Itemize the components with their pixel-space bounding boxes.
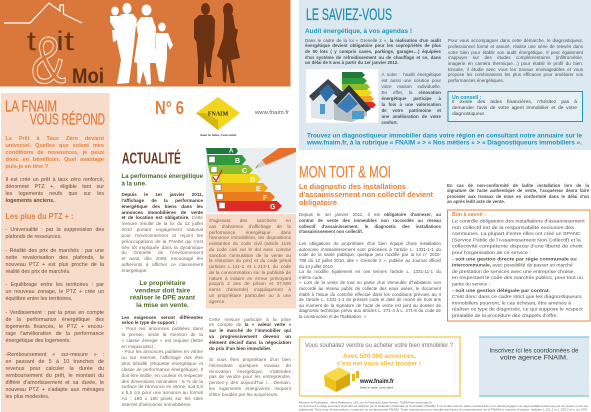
illustration: dark couple silhouettes xyxy=(194,3,240,84)
callout: un conseil: Il existe des aides financières, n'hésitez pas à xyxy=(452,100,577,105)
callout: un conseil: Un conseil : xyxy=(452,95,482,101)
panel: agency contact: votre agence FNAIM. xyxy=(500,354,568,362)
article text: support requirements: plus détaillé (étiquette énergétique et xyxy=(122,361,203,366)
illustration: houses with energy bars xyxy=(306,69,378,123)
list: Verdissement: énergétique des logements. xyxy=(6,338,71,344)
logo: FNAIM diamond: FNAIM xyxy=(208,112,228,118)
footer legal text: Membre de Publication : René Pallincourt, 129, rue du Faubourg Saint Honoré, 75008 Paris www.fnaim.fr xyxy=(299,400,432,404)
article text: code de la santé: au moment de la signature de l'acte de vente est joint au dossier de xyxy=(299,303,441,308)
list: Verdissement: rage l'amélioration de la performance xyxy=(6,331,104,337)
article text: valeur verte: en compte de la « valeur verte » xyxy=(209,322,291,327)
list: Remboursement: revenus pour calculer la durée du xyxy=(6,366,104,372)
text: diagnostiqueur: s'appuyer sur des études complémentaires (infiltrométrie, xyxy=(448,55,583,60)
question text xyxy=(6,136,104,171)
text: non-conformité xyxy=(447,183,589,206)
text: Grenelle intro: Dans le cadre de la loi « Grenelle 2 », la réalisation d'un audit xyxy=(305,38,441,43)
article text: left column xyxy=(122,192,203,274)
article text: obligation xyxy=(299,212,441,235)
list: Réalité des prix: - Réalité des prix de marchés : par une xyxy=(6,248,104,254)
callout: bon à savoir: (Service Public de l'Assainissement Non Collectif) et la xyxy=(452,237,581,243)
illustration: energy label chart: A xyxy=(229,148,234,154)
article text: énergivores: Si vous êtes propriétaire d'un bien xyxy=(209,357,291,362)
advertisement: FNAIM annonces: www.fnaim.fr xyxy=(359,379,395,385)
callout: bon à savoir: préalable de la procédure dite d'appels d'offre. xyxy=(452,313,558,319)
panel: sanctions: (articles L.121-1 et L.213-1 du code xyxy=(209,264,291,269)
article text: support requirements: x 5,5 cm pour une annonce au format xyxy=(122,390,203,395)
intro paragraph: les logements neufs que sur les xyxy=(6,191,104,197)
masthead banner xyxy=(0,0,290,97)
article text: valeur verte: sur le marché de l'immobilier qui xyxy=(209,328,291,333)
list: Equilibrage: - Equilibrage entre les territoires : par xyxy=(6,282,104,288)
list: Remboursement xyxy=(6,352,104,401)
illustration: energy label chart: E xyxy=(256,186,261,193)
footer legal text: adhérents. Pour plus d'informations, contactez un professionnel FNAIM. Toute reproduction est interdite sauf avec le consentement de la FNAIM et mention d'origine, (articles L.121-1 et L.335-2 et s. du CPI). xyxy=(299,408,588,412)
text: diagnostiqueur: Pour vous accompagner dans cette démarche, le diagnostiqueur, xyxy=(448,38,583,43)
article text: left column: très tôt impliquée dans la dynamique xyxy=(122,245,203,250)
heading: Le saviez-vous: LE SAVIEZ-VOUS xyxy=(306,6,392,24)
text: Grenelle intro xyxy=(305,38,441,67)
article text: code de la santé: « Lors de la vente de tout ou partie d'un immeuble d'habitation non xyxy=(299,280,441,285)
article text: left column: 2010 portant engagement national xyxy=(122,227,203,232)
text: diagnostiqueur: performances énergétiques. xyxy=(448,78,504,83)
list: Remboursement: nouveau PTZ + s'adapte aux ménages xyxy=(6,387,104,393)
illustration: energy label chart: D xyxy=(250,177,255,184)
callout: bon à savoir: - soit une gestion directe par régie communale ou xyxy=(452,256,577,262)
article text: code de la santé: autonome d'assainissement sont précisées à l'article L. 1331-1-1 du xyxy=(299,247,441,252)
panel: sanctions: cas d'absence d'affichage de la xyxy=(209,224,291,229)
callout: bon à savoir: en respectant le code des marchés publics, pour tout ou xyxy=(452,275,583,281)
list: Verdissement: - Verdissement : par la prise en compte xyxy=(6,310,104,316)
list: Verdissement: de la performance énergétique des xyxy=(6,317,104,323)
article text: support requirements: doit être lisible, en couleur et respecter xyxy=(122,373,203,378)
article text: énergivores: pas de vendre pour les entreprendre, xyxy=(209,374,291,379)
pull quote: vendeur doit faire xyxy=(135,287,190,294)
subheading: Les plus du PTZ: Les plus du PTZ + : xyxy=(6,212,74,221)
article text: left column: et avait, dès 2008, encouragé les xyxy=(122,256,203,261)
article text: support requirements: Internet d'annonces immobilières. xyxy=(122,402,191,407)
text: diagnostiqueur xyxy=(448,38,583,84)
article text: left column: annonces immobilières de vente xyxy=(122,210,203,215)
subheading: diagnostic xyxy=(299,182,434,207)
callout: bon à savoir: intercommunale, avec possibilité de passer un marché xyxy=(452,263,573,269)
article text: énergivores: rénovation énergétique, n'attendez xyxy=(209,369,291,374)
logo word: Moi: Moi xyxy=(72,65,104,88)
icon: house outline xyxy=(4,3,82,23)
article text: support requirements: classe de performance énergétique). Il xyxy=(122,367,203,372)
panel: agency contact: Inscrivez ici les coordonnées de xyxy=(490,348,579,354)
heading: La FNAIM vous répond: LA FNAIM xyxy=(5,98,57,116)
article text: énergivores xyxy=(209,357,291,398)
intro paragraph xyxy=(6,177,104,205)
panel: sanctions: performance énergétique dans xyxy=(209,230,291,235)
footer legal text: Ce document à usage purement informatif est distribué par la Fédération Nationale de l'Immobilier (FNAIM). Il ne confère aucune valeur contractuelle et ne saurait engager une responsabilité quelconque de son auteur ou de ses xyxy=(299,404,589,408)
article text: support requirements: Les exigences seront différentes xyxy=(122,314,203,320)
article text: support requirements: « classe énergie » est requise (lettre xyxy=(122,338,203,343)
article text: énergivores: nécessitant quelques travaux de xyxy=(209,363,291,368)
article text: left column: et de location est obligatoire. Cette xyxy=(122,215,203,220)
panel: Actualité xyxy=(122,148,203,408)
text: diagnostiqueur: votre bien pour établir son audit énergétique. Il peut également xyxy=(448,50,583,54)
article text: énergivores: pensez-y dès aujourd'hui !... Demain, xyxy=(209,380,291,385)
subheading: diagnostic: Le diagnostic des installations xyxy=(299,182,406,191)
callout: bon à savoir: Le contrôle obligatoire des installations d'assainissement xyxy=(452,218,585,224)
question text: Le Prêt à Taux Zéro devient xyxy=(6,136,104,142)
list: Remboursement: les plus modestes. xyxy=(6,394,49,400)
text: Grenelle intro: énergétique devient obligatoire pour les copropriétés de plus xyxy=(305,43,441,48)
logo word: toit: t xyxy=(27,26,37,56)
article text: valeur verte: va progressivement devenir un xyxy=(209,334,291,339)
call to action: annuaire xyxy=(306,132,583,146)
article text: left column: énergétique des biens dans les xyxy=(122,204,203,209)
article text: code de la santé: de l'article L. 1331-1-1 du présent code et daté de moins de trois ans xyxy=(299,297,441,302)
article text: code de la santé: même code : xyxy=(299,275,325,280)
callout: bon à savoir: - soit une gestion déléguée par contrat. xyxy=(452,288,551,294)
panel: sanctions: S'agissant des sanctions en xyxy=(209,218,291,223)
article text: code de la santé: La loi modifie également en ces termes l'article L. 1331-11-1 du xyxy=(299,269,441,274)
list: Réalité des prix: réalité des prix de marchés. xyxy=(6,269,71,275)
text: diagnostiqueur: Ensuite, il étudie avec vous les travaux envisageables et vous xyxy=(448,67,583,72)
advertisement: FNAIM annonces: c'est net vous allez trouver ! xyxy=(337,360,421,368)
article text: support requirements: en majuscules) ; xyxy=(122,344,156,349)
panel: La FNAIM vous répond xyxy=(1,93,110,412)
subheading: diagnostic: obligatoire xyxy=(299,198,337,207)
list: Remboursement: remboursement du prêt, le montant du xyxy=(6,373,104,379)
list: Universalité: - Universalité : par la suppression des xyxy=(6,227,104,233)
logo word: toit: it xyxy=(56,26,75,56)
text: Grenelle intro: un délai de 5 ans à partir du 1er janvier 2012. xyxy=(305,60,398,65)
panel: sanctions: jusqu'à 2 ans de prison et 37.500 xyxy=(209,281,291,286)
article text: support requirements: - Pour les annonces publiées en vitrine xyxy=(122,349,203,354)
text: à noter: la fois à une valorisation xyxy=(382,102,441,106)
text: à noter: énergétique participe à xyxy=(382,96,441,100)
heading: Mon toit et moi: MON TOIT & MOI xyxy=(299,163,391,181)
list: Equilibrage: équilibre entre les territoires. xyxy=(6,296,72,302)
list: Equilibrage xyxy=(6,282,104,303)
panel: sanctions: la réduction du prix) et du code pénal xyxy=(209,258,291,263)
article text: code de la santé: raccordé au réseau public de collecte des eaux usées, le document xyxy=(299,286,441,291)
text: diagnostiqueur: propose les combinaisons les plus efficaces pour améliorer vos xyxy=(448,72,583,77)
article text: code de la santé: du 13 juillet 2010. xyxy=(299,264,334,269)
advertisement: FNAIM annonces: Vous souhaitez vendre ou acheter votre bien immobilier ? xyxy=(305,342,454,349)
article text: obligation: contrat de vente des immeubles non raccordés au réseau xyxy=(299,218,441,223)
article text: left column: mesure résulte de la loi du 12 juillet xyxy=(122,221,203,226)
intro paragraph: logements anciens. xyxy=(6,198,55,204)
article text: valeur verte: élément décisif dans la négociation xyxy=(209,340,291,345)
article text: left column: Depuis le 1er janvier 2011, xyxy=(122,192,203,197)
article text: left column: pour l'environnement et rejoint les xyxy=(122,233,203,238)
question text: puis-je en tirer ? xyxy=(6,164,48,170)
text: diagnostiqueur: imagerie en caméra thermique…) pour établir le profil du bien. xyxy=(448,61,583,66)
call to action: annuaire: www.fnaim.fr, à la rubrique « FNAIM » > « Nos métiers » > « Diagnostiqueurs immobiliers ». xyxy=(306,140,582,146)
logo: FNAIM diamond: Avec le cube, c'est carré. xyxy=(200,133,237,137)
list: Remboursement: -Remboursement « sur-mesure » : xyxy=(6,352,104,358)
article text: support requirements: selon le type de support : xyxy=(122,320,177,325)
logo word: toit xyxy=(27,26,75,56)
article text: code de la santé: Les obligations du propriétaire d'un bien équipé d'une installation xyxy=(299,241,441,246)
article text: obligation: d'assainissement non collectif. xyxy=(299,229,363,234)
illustration: energy label chart: F xyxy=(263,195,268,202)
list: Réalité des prix xyxy=(6,248,104,276)
callout: bon à savoir: communes. La plupart d'entre elles ont créé un SPANC xyxy=(452,231,581,237)
illustration: energy label chart: G xyxy=(270,204,276,211)
article text: code de la santé: 788 du 12 juillet 2010, dite « Grenelle 2 », publiée au Journal officiel xyxy=(299,258,441,263)
panel: Mon toit et moi xyxy=(299,163,590,321)
pull quote: Le propriétaire xyxy=(139,280,186,287)
panel: sanctions: un propriétaire particulier ou à une xyxy=(209,293,291,298)
text: non-conformité: En cas de non-conformité de ladite installation lors de la xyxy=(447,183,589,188)
logo: FNAIM diamond xyxy=(196,97,240,137)
illustration: energy label chart: B xyxy=(235,158,240,165)
panel: Le saviez-vous xyxy=(299,0,591,150)
article text: code de la santé: diagnostic technique prévu aux articles L. 271-4 à L. 271-5 du code de xyxy=(299,308,441,313)
text: Grenelle intro: d'un système de refroidissement ou de chauffage et ce, dans xyxy=(305,55,441,60)
article text: left column: l'affichage de la performance xyxy=(122,198,203,203)
icon: yellow cube xyxy=(324,367,359,392)
article text: valeur verte xyxy=(209,316,291,352)
callout: bon à savoir: réaliser ce type de diagnostic, ce qui suppose le respect xyxy=(452,307,583,313)
list: Remboursement: en passant de 5 à 10 tranches de xyxy=(6,359,104,365)
website address: www.fnaim.fr xyxy=(254,110,289,116)
text: non-conformité: an après ledit acte de vente. xyxy=(447,199,505,204)
article text: valeur verte: Cette mesure participe à la prise xyxy=(209,316,291,322)
article text: obligation: Depuis le 1er janvier 2011, il est obligatoire d'annexer, au xyxy=(299,212,441,217)
callout: bon à savoir: de prestation de services avec une entreprise choisie, xyxy=(452,269,575,275)
pull quote: la mise en vente. xyxy=(136,302,189,309)
panel: sanctions: du code civil sur le dol avec comme xyxy=(209,247,291,252)
callout: bon à savoir: immobiliers pourront, le cas échéant, être amenés à xyxy=(452,300,571,306)
panel: sanctions: euros d'amende) s'appliqueront à xyxy=(209,287,291,292)
intro paragraph: Il est créé un prêt à taux zéro renforcé, xyxy=(6,177,104,183)
pull quote xyxy=(130,280,196,309)
article text: code de la santé: établi à l'issue du contrôle effectué dans les conditions prévues au II xyxy=(299,292,441,297)
callout: bon à savoir: C'est donc dans ce cadre strict que les diagnostiqueurs xyxy=(452,294,582,300)
text: à noter: une amélioration de votre xyxy=(382,114,441,118)
intro paragraph: dénommé PTZ +, éligible tant sur xyxy=(6,184,104,190)
subheading: performance énergétique xyxy=(122,173,203,188)
question text: conditions de ressources, je peux xyxy=(6,150,104,156)
call to action: annuaire: Trouvez un diagnostiqueur immobilier dans votre région en consultant notre annuaire sur le xyxy=(307,132,583,140)
footer legal text xyxy=(299,400,589,412)
advertisement: FNAIM annonces: Avec 500 000 annonces, xyxy=(343,353,416,360)
advertisement: FNAIM annonces: Avec le cube, c'est carré. xyxy=(360,386,394,390)
article text: énergivores: les logements énergivores risquent xyxy=(209,386,291,391)
issue number: N° 6 xyxy=(155,98,184,118)
panel: sanctions: existantes du code civil (article 1116 xyxy=(209,241,291,246)
panel: sanctions xyxy=(206,214,296,308)
article text: support requirements: ou sur Internet, l'affichage doit être xyxy=(122,355,203,360)
heading: La FNAIM vous répond xyxy=(5,98,105,128)
text: à noter: est aussi une solution pour xyxy=(382,78,441,82)
article text: support requirements: - Pour les annonces publiées dans xyxy=(122,326,203,331)
advertisement: FNAIM annonces xyxy=(300,337,460,396)
callout: bon à savoir: Bon à savoir : xyxy=(452,212,487,218)
article text: obligation: collectif d'assainissement, le diagnostic des installations xyxy=(299,224,441,229)
article text: code de la santé: la construction et de l'habitation. » xyxy=(299,314,366,319)
text: à noter xyxy=(382,72,441,126)
article text: support requirements: A4 ; 180 x 180 pixels sur les sites xyxy=(122,396,203,401)
text: à noter: votre maison individuelle. xyxy=(382,84,441,88)
panel: sanctions: agence. xyxy=(209,299,226,304)
text: diagnostiqueur: professionnel formé et assuré, réalise une série de relevés dans xyxy=(448,44,583,49)
text: à noter: En effet, la rénovation xyxy=(382,90,441,94)
callout: bon à savoir: non collectif est de la responsabilité exclusive des xyxy=(452,225,575,231)
panel: agency contact xyxy=(479,336,589,396)
illustration: energy label chart: C xyxy=(242,168,247,175)
text: à noter: confort. xyxy=(382,120,398,124)
callout: bon à savoir: pour l'organisation de ce service : xyxy=(452,250,531,256)
article text: support requirements: surface de l'annonce en vitrine, soit 5,5 xyxy=(122,384,203,389)
callout: un conseil: diagnostiqueur. xyxy=(452,112,485,117)
callout: bon à savoir: collectivité compétente dispose d'une liberté de choix xyxy=(452,244,583,250)
list: Réalité des prix: nette revalorisation des plafonds, le xyxy=(6,255,104,261)
callout: bon à savoir xyxy=(448,210,590,321)
article text: code de la santé xyxy=(299,241,441,320)
article text: left column: préoccupations de la FNAIM qui s'est xyxy=(122,239,203,244)
article text: left column: adhérents à afficher ce classement xyxy=(122,262,203,267)
article text: left column: du Grenelle de l'environnement xyxy=(122,250,203,255)
list: Réalité des prix: nouveau PTZ + est plus proche de la xyxy=(6,262,104,268)
article text: énergivores: d'être boudés par les acquéreurs. xyxy=(209,392,279,397)
article text: support requirements xyxy=(122,314,203,408)
article text: left column: énergétique. xyxy=(122,268,148,273)
text: à noter: A noter : l'audit énergétique xyxy=(382,72,441,76)
article text: code de la santé: code de la santé publique, quelque peu modifié par la loi n° 2010- xyxy=(299,252,441,257)
list: Universalité: plafonds de ressources. xyxy=(6,234,62,240)
heading: La FNAIM vous répond: VOUS RÉPOND xyxy=(30,112,105,128)
list: Verdissement: logements financés, le PTZ + encou- xyxy=(6,324,104,330)
illustration: energy label chart xyxy=(206,148,296,213)
subheading: performance énergétique: La performance énergétique xyxy=(122,173,203,180)
text: non-conformité: signature de l'acte authentique de vente, l'acquéreur devra faire xyxy=(447,188,589,193)
panel: sanctions: nature à induire en erreur prévoyant xyxy=(209,276,291,281)
logo ampersand: & xyxy=(31,23,66,97)
subheading: performance énergétique: à la une. xyxy=(122,180,147,188)
subheading: audit énergétique: Audit énergétique, à vos agendas ! xyxy=(305,28,412,35)
list: Universalité xyxy=(6,227,104,241)
pull quote: réaliser le DPE avant xyxy=(130,295,196,302)
panel: sanctions: sanction l'annulation de la vente ou xyxy=(209,253,291,258)
callout: bon à savoir: partie du service ; xyxy=(452,282,490,288)
list: Verdissement xyxy=(6,310,104,345)
illustration: white family silhouettes xyxy=(110,3,173,85)
text: Grenelle intro: de 50 lots ( y compris caves, parkings, garages…) équipées xyxy=(305,49,441,54)
question text: donc en bénéficier. Quel avantage xyxy=(6,157,104,163)
text: non-conformité: procéder aux travaux de mise en conformité dans le délai d'un xyxy=(447,194,589,199)
article text: valeur verte: du prix d'un bien immobilier. xyxy=(209,346,271,351)
text: à noter: de votre patrimoine et xyxy=(382,108,441,112)
article text: support requirements: la presse, seule la mention de la xyxy=(122,332,203,337)
question text: universel. Quelles que soient mes xyxy=(6,143,104,149)
callout: un conseil xyxy=(448,92,582,122)
list: Remboursement: différé d'amortissement et sa durée, le xyxy=(6,380,104,386)
heading: Actualité: ACTUALITÉ xyxy=(122,148,181,168)
panel: sanctions: l'annonce immobilière, les dispositions xyxy=(209,235,291,240)
list: Equilibrage: un nouveau zonage, le PTZ + crée un xyxy=(6,289,104,295)
subheading: diagnostic: d'assainissement non collectif devient xyxy=(299,190,434,199)
panel: sanctions: de la consommation sur la publicité de xyxy=(209,270,291,275)
article text: support requirements: des dimensions minimales : 5 % de la xyxy=(122,379,203,384)
callout: un conseil: demander l'avis de votre agent immobilier et de votre xyxy=(452,106,577,111)
